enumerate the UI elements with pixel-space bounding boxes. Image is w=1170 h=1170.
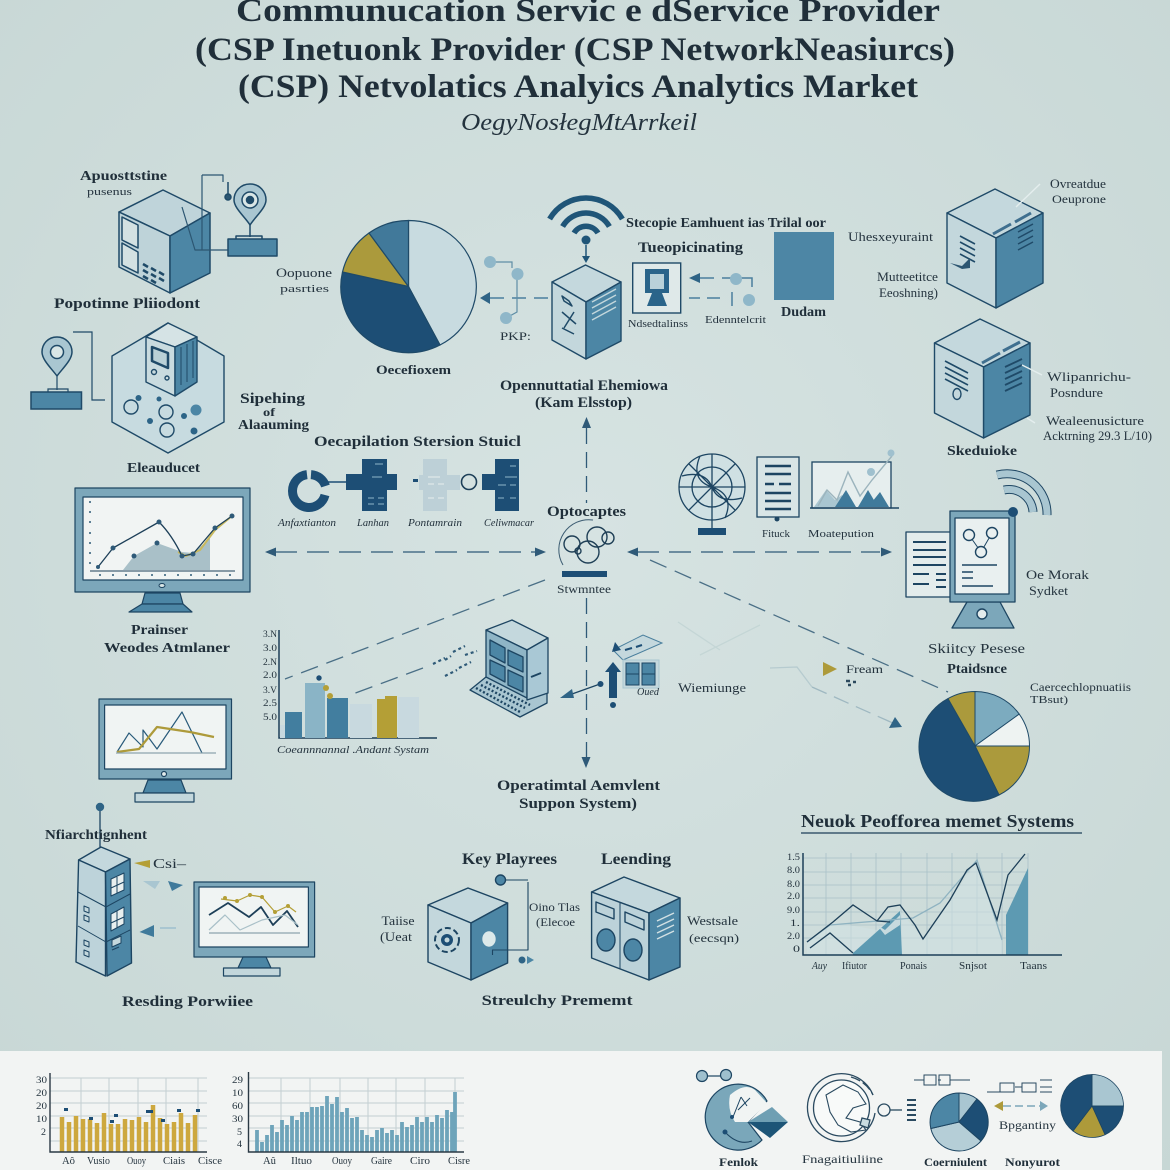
bar chart: teal bars: Gaire: [371, 1156, 392, 1167]
label: leading cube: (eecsqn): [689, 931, 739, 945]
bar chart: teal bars: Ouoy: [332, 1156, 353, 1167]
labels: station blocks: Anfaxtianton: [277, 518, 336, 529]
icon: wifi signal: [550, 198, 622, 263]
label: top left cube: Popotinne Pliiodont: [54, 296, 200, 312]
label: pie chart right: [1030, 680, 1131, 706]
label: blue square: Dudam: [781, 304, 827, 319]
bar chart: gold bars: 20: [36, 1089, 47, 1099]
icon: mountain chart: [810, 450, 899, 508]
icon: leading server cube: [592, 877, 680, 980]
label: operational support: [497, 778, 660, 812]
pie chart: bottom right: [1061, 1074, 1124, 1137]
label: right monitor: Skiitcy Pesese: [928, 642, 1025, 657]
label: device card: [628, 314, 766, 330]
bar chart: teal bars: 4: [237, 1140, 242, 1150]
label: right monitor: Ptaidsnce: [947, 662, 1007, 677]
label: large monitor: [104, 622, 230, 655]
label: large monitor: Weodes Atmlaner: [104, 640, 230, 655]
label: operational support: Suppon System): [519, 796, 637, 812]
label: scope heading: Stecopie Eamhuent ias Trilal oor: [626, 215, 826, 230]
pie chart right: [919, 691, 1030, 801]
callout: fream marker: Fream: [846, 662, 884, 676]
labels: station blocks: [277, 518, 535, 529]
label: top right cube: Oeuprone: [1052, 192, 1106, 206]
icon: device card: [633, 263, 681, 313]
callout: fream marker: [823, 662, 884, 685]
line chart: network performance: 1.: [790, 919, 800, 929]
label: hexagon: Eleauducet: [127, 461, 200, 476]
line chart: network performance: 2.0: [787, 892, 800, 902]
label: hexagon: [127, 391, 309, 476]
bar chart: center left: 2.0: [263, 671, 277, 681]
arrows: device card links: [689, 273, 755, 306]
label: key players: Key Playrees: [462, 851, 557, 868]
label: right cube: [947, 369, 1152, 458]
label: tower heading: Nfiarchtignhent: [45, 828, 147, 843]
bar chart: gold bars: Cisce: [198, 1156, 222, 1167]
label: top left cube: [54, 169, 200, 312]
label: monitor row: Resding Porwiiee: [122, 994, 253, 1010]
bar chart: gold bars: 2: [41, 1128, 46, 1138]
bar chart: center left: 2.N: [263, 658, 277, 668]
icon: server cube right: [934, 319, 1042, 438]
icon row: station blocks: [292, 459, 519, 511]
line chart: network performance: 9.0: [787, 906, 800, 916]
hub icon: optocaptes: Stwmntee: [557, 582, 611, 596]
label: top left cube: Apuosttstine: [80, 169, 167, 184]
label: key players: Leending: [601, 851, 671, 868]
label: central server: (Kam Elsstop): [535, 395, 632, 411]
labels: bottom right icons: Bpgantiny: [999, 1120, 1056, 1132]
icon: document: [757, 457, 799, 522]
label: pie chart right: Caercechlopnuatiis: [1030, 680, 1131, 694]
bar chart: center left: 3.0: [263, 644, 277, 654]
label: hexagon: Sipehing: [240, 391, 306, 407]
label: top right cube: Mutteetitce: [877, 270, 938, 284]
arrow: server to pie with nodes: [480, 256, 550, 324]
icon: key player cube with gear: [428, 875, 534, 980]
bar chart: gold bars: Aô: [62, 1156, 75, 1167]
icon: pacman diamond: [696, 1070, 788, 1150]
title: [195, 0, 955, 105]
bar chart: gold bars: Vusio: [87, 1156, 110, 1167]
icon: server cube top left: [119, 175, 277, 293]
icon: hexagon server cluster: [112, 323, 224, 453]
line chart: network performance: 8.0: [787, 866, 800, 876]
hub icon: optocaptes: Optocaptes: [547, 504, 626, 520]
bar chart: teal bars: Cisre: [448, 1156, 470, 1167]
title: (CSP) Netvolatics Analyics Analytics Market: [238, 69, 918, 105]
bar chart: gold bars: Ouoy: [127, 1156, 147, 1167]
labels: bottom right icons: Fnagaitiuliine: [802, 1152, 883, 1166]
label: scope heading: [626, 215, 826, 256]
label: leading cube: Streulchy Prememt: [482, 993, 633, 1009]
labels: bottom right icons: Fenlok: [719, 1155, 758, 1169]
line chart: network performance: Ifiutor: [842, 961, 867, 972]
label: leading cube: [482, 914, 739, 1009]
callout: csi: Csi–: [153, 856, 186, 871]
bar chart: teal bars: 10: [232, 1089, 243, 1099]
bar chart: gold bars: [36, 1073, 222, 1167]
bar chart: teal bars: 60: [232, 1102, 243, 1112]
label: pie chart right: TBsut): [1030, 694, 1068, 706]
label: device card: Edenntelcrit: [705, 314, 766, 326]
label: scope heading: Tueopicinating: [638, 240, 744, 256]
line chart: network performance: Snjsot: [959, 961, 987, 972]
bar chart: teal bars: [232, 1072, 470, 1167]
bar chart: gold bars: Ciais: [163, 1156, 185, 1167]
pie chart: bottom middle: [930, 1093, 988, 1151]
icon: small hardware with arrow: [560, 635, 662, 708]
line chart: network performance: 2.0: [787, 932, 800, 942]
icon: monitor with document and signal: [906, 474, 1047, 628]
icon: location pin left: [31, 332, 105, 409]
bar chart: teal bars: Iltuo: [291, 1156, 312, 1167]
label: pie chart top: PKP:: [500, 329, 531, 343]
labels: bottom right icons: Nonyurot: [1005, 1155, 1060, 1169]
icon: globe: [679, 454, 745, 535]
bar chart: gold bars: 10: [36, 1115, 47, 1125]
labels: bottom right icons: Coerniulent: [924, 1155, 987, 1169]
label: pie chart top: [276, 265, 531, 377]
bar chart: teal bars: Ciro: [410, 1156, 430, 1167]
bar chart: teal bars: 5: [237, 1128, 242, 1138]
label: large monitor: Prainser: [131, 622, 188, 637]
callout: csi: [134, 856, 186, 871]
icon: concentric globe: [807, 1074, 916, 1142]
label: top right cube: Ovreatdue: [1050, 177, 1106, 191]
label: globe row: Fituck: [762, 528, 790, 540]
line chart: network performance: 8.0: [787, 880, 800, 890]
subtitle: OegyNosłegMtArrkeil: [461, 110, 697, 136]
labels: bottom right icons: [719, 1120, 1060, 1169]
label: pie chart top: Oecefioxem: [376, 362, 451, 377]
pie chart top: [341, 220, 476, 353]
label: hexagon: Alaauming: [238, 418, 309, 433]
monitor: gold dots chart: [194, 882, 315, 976]
line chart: network performance: [787, 853, 1062, 972]
label: top right cube: Uhesxeyuraint: [848, 229, 933, 244]
bar chart: teal bars: Aû: [263, 1156, 277, 1167]
icon: tall server tower: [76, 803, 132, 976]
bar chart: center left: Coeannnannal .Andant Systam: [277, 744, 429, 756]
label: key player cube: Oino Tlas: [529, 900, 580, 914]
line chart: network performance: 0: [793, 945, 800, 955]
label: globe row: Moatepution: [808, 528, 875, 540]
labels: station blocks: Pontamrain: [407, 518, 462, 529]
monitor: small with gold line chart: [99, 699, 232, 802]
label: right cube: Acktrning 29.3 L/10): [1043, 429, 1152, 443]
title: (CSP Inetuonk Provider (CSP NetworkNeasiurcs): [195, 32, 955, 68]
arrows: tower to monitor: [140, 881, 183, 937]
label: device card: Ndsedtalinss: [628, 319, 688, 330]
label: key player cube: (Ueat: [380, 930, 413, 944]
label: hardware: [637, 681, 747, 698]
labels: station blocks: Celiwmacar: [484, 518, 535, 529]
label: key players: [462, 851, 671, 868]
label: pie chart top: Oopuone: [276, 265, 332, 280]
label: operational support: Operatimtal Aemvlent: [497, 778, 660, 794]
icon: server cube top right: [947, 184, 1043, 308]
bar chart: center left: 3.V: [263, 686, 277, 696]
label: hardware: Oued: [637, 687, 660, 698]
icon: central server: [552, 265, 621, 359]
bar chart: center left: 3.N: [263, 630, 277, 640]
label: leading cube: Westsale: [687, 914, 739, 928]
bar chart: gold bars: 30: [36, 1076, 47, 1086]
line chart: network performance: Ponais: [900, 961, 927, 972]
label: central server: Opennuttatial Ehemiowa: [500, 378, 669, 394]
line chart: network performance: 1.5: [787, 853, 800, 863]
arrows: central dashed hub lines: [265, 417, 948, 768]
hub icon: optocaptes: [547, 504, 626, 596]
line chart: network performance: Taans: [1020, 961, 1047, 972]
label: right monitor: Oe Morak: [1026, 567, 1090, 582]
icon: isometric computer: [470, 620, 548, 717]
labels: station blocks: Lanhan: [356, 518, 389, 529]
label: top right cube: Eeoshning): [879, 286, 938, 300]
bar chart: teal bars: 30: [232, 1115, 243, 1125]
label: central server: [500, 378, 669, 411]
label: hardware: Wiemiunge: [678, 681, 747, 695]
heading: network performance: Neuok Peofforea memet Systems: [801, 811, 1074, 831]
label: top left cube: pusenus: [87, 187, 132, 198]
label: key player cube: [380, 900, 580, 944]
arrow: gold and teal double arrow: [994, 1101, 1048, 1111]
bar chart: teal bars: 29: [232, 1076, 243, 1086]
label: key player cube: (Elecoe: [536, 915, 575, 929]
label: right monitor: Sydket: [1029, 583, 1068, 598]
bar chart: center left: [263, 630, 437, 756]
label: right monitor: [928, 567, 1090, 677]
heading: occupation station model: Oecapilation Stersion Stuicl: [314, 434, 521, 450]
label: key player cube: Taiise: [382, 914, 415, 928]
blue square: [774, 232, 834, 300]
label: right cube: Posndure: [1050, 386, 1104, 400]
label: hexagon: of: [263, 405, 276, 419]
label: right cube: Wealeenusicture: [1046, 414, 1145, 428]
bar chart: center left: 2.5: [263, 699, 277, 709]
label: right cube: Skeduioke: [947, 443, 1017, 458]
label: pie chart top: pasrties: [280, 283, 329, 295]
line chart: network performance: Auy: [811, 961, 827, 972]
label: globe row: [762, 528, 875, 540]
bar chart: gold bars: 20: [36, 1102, 47, 1112]
label: right cube: Wlipanrichu-: [1047, 369, 1131, 384]
bar chart: center left: 5.0: [263, 713, 277, 723]
monitor: large with area chart: [75, 488, 250, 612]
label: top right cube: [848, 177, 1106, 300]
icon: small flow blocks: [914, 1075, 1052, 1092]
panel: bottom strip: [0, 1051, 1162, 1170]
